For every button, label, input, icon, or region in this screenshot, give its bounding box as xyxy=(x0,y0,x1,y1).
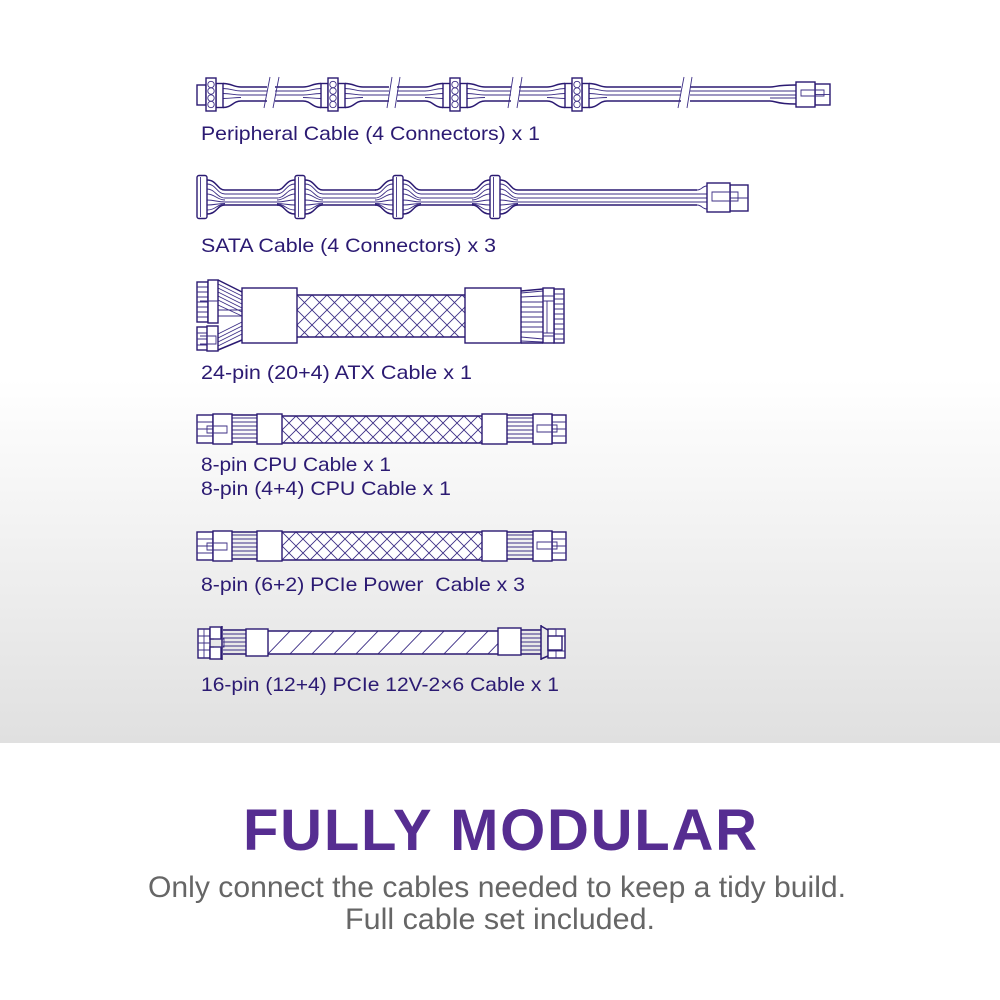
subtitle xyxy=(148,871,846,936)
peripheral cable label: Peripheral Cable (4 Connectors) x 1 xyxy=(201,123,540,145)
24-pin cable label: 24-pin (20+4) ATX Cable x 1 xyxy=(201,362,472,384)
peripheral cable diagram xyxy=(197,77,830,111)
sata cable label: SATA Cable (4 Connectors) x 3 xyxy=(201,235,496,257)
title: FULLY MODULAR xyxy=(243,798,757,863)
8-pin cpu cable diagram xyxy=(197,414,566,444)
8-pin cpu cable labels xyxy=(201,454,451,500)
8-pin cpu cable labels: 8-pin CPU Cable x 1 xyxy=(201,454,391,476)
subtitle: Only connect the cables needed to keep a tidy build. xyxy=(148,871,846,904)
sata cable diagram xyxy=(197,176,748,218)
8-pin pcie cable label: 8-pin (6+2) PCIe Power Cable x 3 xyxy=(201,574,525,596)
24-pin atx cable diagram xyxy=(197,280,564,351)
8-pin cpu cable labels: 8-pin (4+4) CPU Cable x 1 xyxy=(201,478,451,500)
16-pin cable label: 16-pin (12+4) PCIe 12V-2×6 Cable x 1 xyxy=(201,674,559,696)
subtitle: Full cable set included. xyxy=(345,903,655,936)
8-pin pcie cable diagram xyxy=(197,531,566,561)
background gradient panel xyxy=(0,0,1000,743)
16-pin cable diagram xyxy=(198,625,565,660)
